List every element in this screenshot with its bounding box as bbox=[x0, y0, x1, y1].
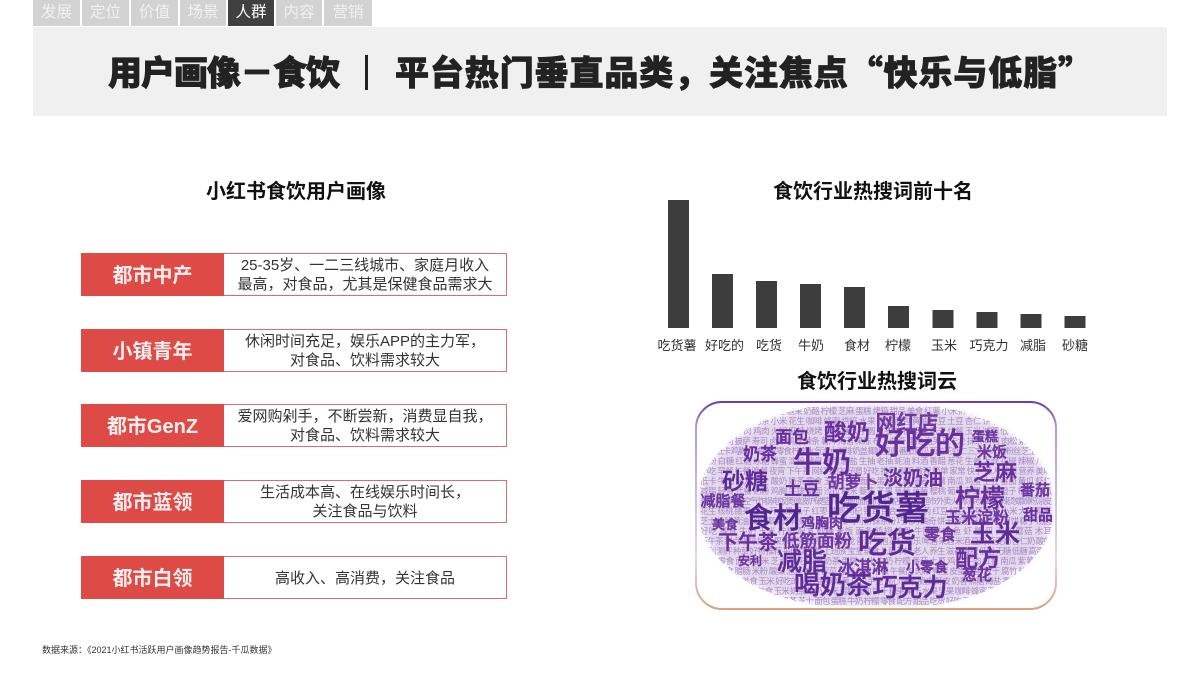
row: 小镇青年 bbox=[81, 329, 507, 372]
large words: 牛奶 bbox=[793, 439, 851, 481]
row: 都市GenZ bbox=[81, 404, 507, 447]
row: 都市中产: 25-35岁、一二三线城市、家庭月收入 bbox=[241, 257, 489, 274]
large words: 配方 bbox=[955, 539, 1001, 573]
large words: 奶茶 bbox=[743, 440, 777, 465]
bar chart: top ten search terms: 吃货 bbox=[756, 338, 782, 353]
navigation tabs: 人群 bbox=[235, 4, 266, 21]
bar chart: top ten search terms: 减脂 bbox=[1020, 338, 1046, 353]
large words: 番茄 bbox=[1020, 479, 1050, 500]
large words: 减脂餐 bbox=[700, 490, 746, 511]
navigation tabs: 场景 bbox=[187, 4, 218, 21]
large words: 酸奶 bbox=[824, 413, 870, 447]
large words: 玉米 bbox=[970, 514, 1020, 550]
word cloud card bbox=[695, 401, 1057, 610]
row: 小镇青年: 休闲时间充足，娱乐APP的主力军， bbox=[245, 333, 485, 350]
bar chart: top ten search terms bbox=[657, 200, 1088, 353]
large words: 喝奶茶 bbox=[794, 565, 872, 602]
filler words: 牛肉 玉米 零食 面粉 芝士 糖果 奶酪 柠檬 芝麻 蛋糕 烤箱 甜品 美食 红薯 小米粥 牛奶 鸡蛋 米饭 花生 面条 bbox=[700, 405, 1052, 417]
row: 都市蓝领: 生活成本高、在线娱乐时间长， bbox=[260, 484, 470, 501]
filler words: 奶油 吐司 披萨 寿司 卤味 鸭脖 辣条 薯片 海苔 果冻 布丁 曲奇 蛋挞 泡芙 马卡龙 抹茶 可可 肉松 紫薯 南瓜 bbox=[700, 435, 1052, 447]
large words: 下午茶 bbox=[718, 526, 778, 555]
row: 都市白领: 高收入、高消费，关注食品 bbox=[275, 570, 455, 587]
heading: top ten search terms: 食饮行业热搜词前十名 bbox=[773, 181, 973, 203]
row: 小镇青年: 小镇青年 bbox=[112, 341, 192, 363]
bar chart: top ten search terms: 食材 bbox=[844, 338, 870, 353]
filler words: 面粉 白糖 红糖 冰糖 蜂蜜 淀粉 酵母 食用油 盐 生抽 老抽 蚝油 料酒 香醋 葱花 生姜 大蒜 花椒 辣椒 八角 bbox=[700, 455, 1052, 467]
navigation tabs: 营销 bbox=[332, 4, 364, 21]
row: 都市蓝领: 关注食品与饮料 bbox=[312, 503, 418, 520]
heading: user portrait: 小红书食饮用户画像 bbox=[206, 181, 386, 203]
title: 平台热门垂直品类，关注焦点“快乐与低脂” bbox=[395, 46, 1093, 95]
navigation tabs: 内容 bbox=[283, 4, 314, 21]
row: 都市GenZ: 爱网购剁手，不断尝新，消费显自我， bbox=[237, 408, 492, 425]
filler words: 低卡 牛肉 配方 芝士 酸奶 奶茶 零食 玉米 柠檬 面包 蛋糕 红薯 燕麦 紫薯 南瓜 鸡蛋 土豆 番茄 黄瓜 虾仁 bbox=[700, 475, 1052, 487]
row: 都市白领: 都市白领 bbox=[112, 568, 192, 590]
large words bbox=[700, 407, 1053, 604]
navigation tabs: 发展 bbox=[41, 4, 72, 21]
large words: 吃货薯 bbox=[827, 481, 929, 530]
row: 都市蓝领: 都市蓝领 bbox=[112, 492, 192, 514]
large words: 淡奶油 bbox=[883, 462, 943, 491]
bar chart: top ten search terms: 玉米 bbox=[931, 338, 957, 353]
bar chart: top ten search terms: 牛奶 bbox=[798, 338, 824, 353]
bar chart: top ten search terms: 吃货薯 bbox=[657, 338, 697, 353]
navigation tabs bbox=[33, 0, 372, 26]
bar chart: top ten search terms: 柠檬 bbox=[885, 338, 911, 353]
filler words: 芝士 奶酪 黄油 淡奶 椰浆 炼乳 奶昔 冰沙 雪糕 可可粉 抹茶粉 巧克力 曲奇 饼干 蛋卷 麻薯 青团 月饼 粽子 汤圆 bbox=[700, 515, 1052, 527]
large words: 胡萝卜 bbox=[828, 468, 878, 493]
filler words: 牛奶 低卡 鸡胸肉 减脂餐 零食 柠檬水 气泡水 咖啡 奶盖 椰奶 豆腐 番茄 黄瓜 西兰花 虾仁 三文鱼 米线 粉丝 芝士 榴莲 bbox=[700, 445, 1052, 457]
row: 都市中产: 最高，对食品，尤其是保健食品需求大 bbox=[237, 276, 492, 293]
large words: 美食 bbox=[712, 514, 738, 533]
filler words: 下午茶 甜点 咖啡 奶茶 果茶 花茶 红茶 绿茶 乌龙 普洱 气泡 苏打 可乐 啤酒 果酒 米酒 豆奶 燕麦奶 杏仁奶 酸奶 bbox=[700, 535, 1052, 547]
title: 用户画像－食饮 bbox=[108, 46, 339, 95]
filler words: 好吃的 零食 甜点 美食 玉米 奶茶 牛奶 小米 蛋糕 面包 饼干 糖果 果干 水果 坚果 咖啡 蜂蜜 芝麻 黑芝麻 花生酱 bbox=[700, 585, 1052, 597]
row: 都市GenZ: 都市GenZ bbox=[107, 416, 198, 438]
large words: 吃货 bbox=[858, 520, 916, 562]
large words: 鸡胸肉 bbox=[801, 513, 843, 533]
large words: 安利 bbox=[738, 552, 762, 569]
filler words: 小米粥 牛奶 美食 玉米 好吃的 配方 蛋黄 奶黄 豆沙 芋泥 流心 爆浆 脆皮 酥皮 奶香 焦糖 海盐 香草 肉桂 薄荷 bbox=[700, 575, 1052, 587]
filler words: 花生 核桃 腰果 杏仁 开心果 瓜子 红枣 桂圆 枸杞 银耳 百合 莲子 山药 红豆 绿豆 黑豆 黄豆 小米 大米 糯米 bbox=[700, 505, 1052, 517]
filler words: 小吃 早餐 午餐 晚餐 夜宵 下午茶 网红 探店 好喝 好吃 推荐 测评 教程 简单 家常 快手 懒人 健康 营养 美味 bbox=[700, 465, 1052, 477]
bar chart: top ten search terms: 巧克力 bbox=[969, 338, 1009, 353]
row: 都市中产: 都市中产 bbox=[112, 265, 192, 287]
large words: 玉米淀粉 bbox=[945, 504, 1009, 528]
filler words: 美食 烘焙 烤箱 空气炸锅 电饭煲 微波炉 破壁机 料理机 面包机 奶茶店 便利店 超市 外卖 火锅 烧烤 串串 麻辣烫 螺蛳粉 凉皮 bbox=[700, 495, 1052, 507]
large words: 柠檬 bbox=[955, 479, 1005, 515]
large words: 小零食 bbox=[906, 557, 948, 577]
bar chart: top ten search terms: 好吃的 bbox=[705, 338, 744, 353]
filler words: 吃货 零食 面包 玉米 芝士 葱花 砂糖 奶茶 蛋糕 小米 牛奶 柠檬 番茄 土豆 鸡蛋 牛肉 红薯 南瓜 紫薯 花生 bbox=[700, 555, 1052, 567]
row: 都市中产 bbox=[81, 253, 507, 296]
large words: 土豆 bbox=[784, 475, 820, 501]
row: 都市白领 bbox=[81, 556, 507, 599]
bar chart: top ten search terms: 砂糖 bbox=[1062, 338, 1088, 353]
large words: 葱花 bbox=[962, 564, 992, 585]
filler words: 配方 做法 奶粉 奶茶 小米 花生 咖啡 蜂蜜 烘焙 水果 蔬菜 面包 黄油 红豆 土豆 杏仁 饼干 果汁 豆浆 酸奶 bbox=[700, 415, 1052, 427]
large words: 面包 bbox=[775, 423, 809, 448]
filler words bbox=[700, 405, 1052, 607]
filler words: 减脂 轻食 代餐 奶粉 鸡胸 牛排 意面 沙拉 糙米 藜麦 芒果 草莓 蓝莓 樱桃 葡萄 苹果 香蕉 橙子 柚子 西瓜 bbox=[700, 485, 1052, 497]
row: 都市蓝领 bbox=[81, 480, 507, 523]
filler words: 好吃 零食 牛奶 玉米 柠檬 配方 砂糖 米饭 面条 鸡翅 排骨 牛腩 羊肉 鱼 虾 蟹 贝 海鲜 蘑菇 木耳 bbox=[700, 525, 1052, 537]
large words: 冰淇淋 bbox=[838, 553, 888, 578]
large words: 减脂 bbox=[777, 542, 827, 578]
large words: 蛋糕 bbox=[972, 426, 998, 445]
large words: 砂糖 bbox=[722, 462, 768, 496]
filler words: 吃货 美食 腊肠 米粉 酸菜 泡菜 咸菜 榨菜 豆瓣 火腿 培根 午餐肉 肉松 鸭蛋 皮蛋 咸蛋 豆干 腐竹 粉条 年糕 bbox=[700, 565, 1052, 577]
title banner bbox=[33, 27, 1167, 116]
large words: 芝麻 bbox=[973, 455, 1017, 487]
large words: 食材 bbox=[744, 495, 802, 537]
large words: 巧克力 bbox=[872, 568, 948, 604]
large words: 零食 bbox=[924, 521, 956, 545]
heading: word cloud: 食饮行业热搜词云 bbox=[797, 371, 957, 393]
large words: 米饭 bbox=[977, 441, 1007, 462]
filler words: 知道的 一点点 玉米 美食 奶茶 芝士 面包 蛋糕 牛奶 柠檬 零食 配方 甜品 吃货 好吃 玉米 砂糖 食材 减脂 巧克力 bbox=[700, 595, 1052, 607]
large words: 低筋面粉 bbox=[782, 528, 852, 553]
navigation tabs: 价值 bbox=[139, 4, 170, 21]
large words: 甜品 bbox=[1023, 504, 1053, 525]
data source note: 数据来源：《2021小红书活跃用户画像趋势报告-千瓜数据》 bbox=[42, 645, 277, 655]
row: 小镇青年: 对食品、饮料需求较大 bbox=[290, 352, 440, 369]
filler words: 食材 零食 牛肉 鸡肉 火锅 麻辣 烧烤 蛋糕 糖水 芋圆 红枣 枸杞 坚果 燕麦 代餐 玉米 减肥 低卡 低脂 轻食 bbox=[700, 425, 1052, 437]
row: 都市GenZ: 对食品、饮料需求较大 bbox=[290, 427, 440, 444]
large words: 好吃的 bbox=[875, 419, 965, 463]
navigation tabs: 定位 bbox=[90, 4, 121, 21]
large words: 网红店 bbox=[876, 407, 938, 437]
filler words: 安利 测评 种草 好物 推荐 平价 学生党 上班族 宝宝 辅食 儿童 孕妇 老人 养生 滋补 减肥 低脂 无糖 低糖 高蛋白 bbox=[700, 545, 1052, 557]
